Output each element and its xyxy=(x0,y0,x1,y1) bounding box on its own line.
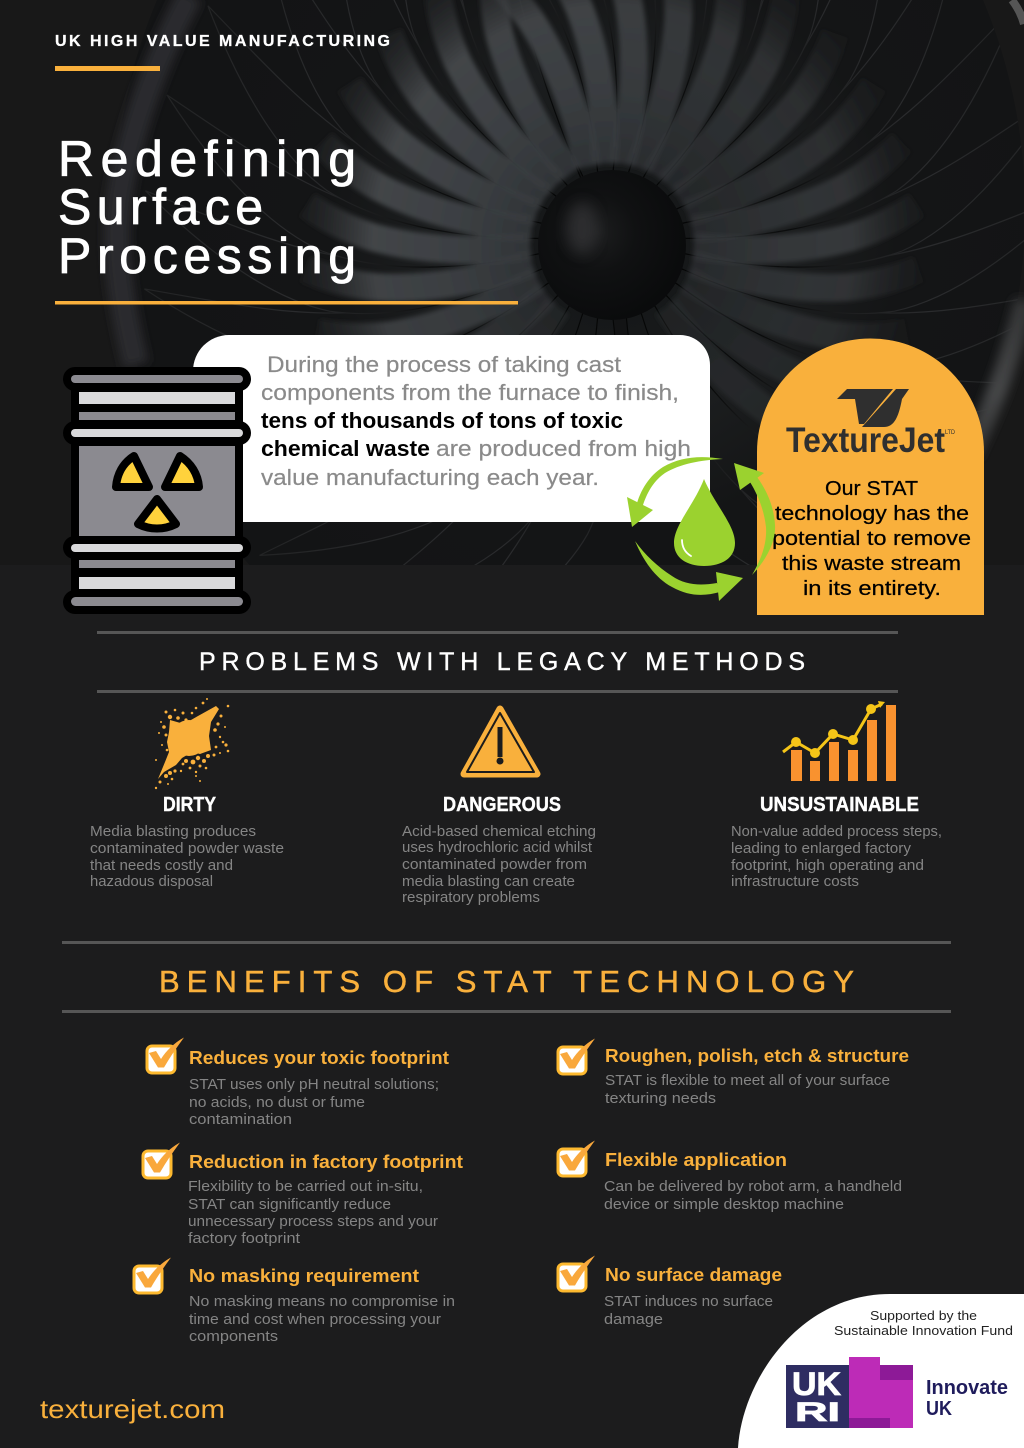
column: dirty: hazadous disposal xyxy=(90,874,213,890)
panel: funder badge xyxy=(738,1294,1024,1448)
panel: TextureJet callout: this waste stream xyxy=(782,553,961,575)
logo: Innovate UK: UK xyxy=(926,1398,952,1420)
panel: waste statement card: value manufacturing each year. xyxy=(261,465,599,490)
benefit: reduces toxic footprint xyxy=(147,1038,449,1128)
icon: dirty splat xyxy=(155,698,229,789)
logo: Innovate UK: Innovate xyxy=(926,1377,1008,1399)
panel: waste statement card: During the process of taking cast xyxy=(267,352,621,377)
benefit: flexible application xyxy=(558,1140,902,1213)
icon: toxic waste barrel xyxy=(63,367,251,614)
column: unsustainable: leading to enlarged factory xyxy=(731,841,912,857)
benefit: roughen, polish, etch and structure: STAT is flexible to meet all of your surface xyxy=(605,1073,890,1089)
heading: benefits of STAT technology xyxy=(62,941,951,1013)
logo: TextureJet: TextureJet xyxy=(786,421,945,460)
icon: recycling arrows and green drop xyxy=(627,457,775,601)
benefit: reduces toxic footprint: no acids, no dust or fume xyxy=(189,1095,365,1111)
column: dirty: Media blasting produces xyxy=(90,824,256,840)
panel: TextureJet callout: Our STAT xyxy=(825,478,918,500)
heading: problems with legacy methods xyxy=(97,631,898,693)
column: unsustainable: infrastructure costs xyxy=(731,874,859,890)
benefit: reduction in factory footprint xyxy=(143,1142,463,1247)
hero image: turbine fan xyxy=(105,0,1024,565)
title: Processing xyxy=(58,228,356,284)
column: unsustainable: Non-value added process steps, xyxy=(731,824,942,840)
header: eyebrow label xyxy=(55,33,390,71)
benefit: reduction in factory footprint: STAT can significantly reduce xyxy=(188,1197,391,1213)
panel: TextureJet callout: potential to remove xyxy=(772,528,971,550)
panel: waste statement card: chemical waste xyxy=(261,436,430,461)
panel: waste statement card: tens of thousands of tons of toxic xyxy=(261,408,623,433)
panel: waste statement card xyxy=(193,335,710,522)
logo: UKRI xyxy=(786,1357,913,1428)
benefit: no surface damage: STAT induces no surface xyxy=(604,1294,773,1310)
benefit: no masking requirement: No masking requirement xyxy=(189,1266,419,1286)
panel: funder badge: Supported by the xyxy=(870,1309,977,1323)
column: dangerous xyxy=(402,709,596,906)
column: dangerous: respiratory problems xyxy=(402,890,540,906)
panel: TextureJet callout: in its entirety. xyxy=(803,578,941,600)
benefit: roughen, polish, etch and structure: Roughen, polish, etch & structure xyxy=(605,1046,909,1066)
column: unsustainable: UNSUSTAINABLE xyxy=(760,794,919,816)
benefit: flexible application: Flexible application xyxy=(605,1150,787,1170)
column: dangerous: media blasting can create xyxy=(402,874,575,890)
column: dangerous: DANGEROUS xyxy=(443,794,561,816)
benefit: no masking requirement: No masking means no compromise in xyxy=(189,1294,455,1310)
benefit: flexible application: Can be delivered by robot arm, a handheld xyxy=(604,1179,902,1195)
panel: funder badge: Sustainable Innovation Fund xyxy=(834,1324,1013,1338)
panel: TextureJet callout: technology has the xyxy=(775,503,969,525)
benefit: no masking requirement: time and cost when processing your xyxy=(189,1312,441,1328)
column: dangerous: uses hydrochloric acid whilst xyxy=(402,840,592,856)
title xyxy=(55,131,518,304)
column: unsustainable xyxy=(731,701,942,890)
header: eyebrow label: UK HIGH VALUE MANUFACTURING xyxy=(55,33,390,50)
benefit: reduction in factory footprint: unnecessary process steps and your xyxy=(188,1214,438,1230)
benefit: no surface damage: No surface damage xyxy=(605,1265,782,1285)
logo: TextureJet: LTD xyxy=(945,430,956,436)
column: dirty xyxy=(90,698,284,890)
benefit: no masking requirement xyxy=(134,1258,455,1345)
icon: rising bar chart xyxy=(783,701,896,781)
benefit: roughen, polish, etch and structure: texturing needs xyxy=(605,1091,716,1107)
benefit: reduces toxic footprint: contamination xyxy=(189,1112,292,1128)
column: unsustainable: footprint, high operating and xyxy=(731,858,924,874)
benefit: reduction in factory footprint: Reduction in factory footprint xyxy=(189,1152,463,1172)
benefit: reduces toxic footprint: STAT uses only pH neutral solutions; xyxy=(189,1077,439,1093)
benefit: no surface damage xyxy=(558,1256,782,1328)
logo: UKRI: UK xyxy=(792,1366,841,1402)
benefit: no masking requirement: components xyxy=(189,1329,278,1345)
logo: TextureJet xyxy=(786,389,956,460)
title: Redefining xyxy=(58,131,356,187)
column: dirty: that needs costly and xyxy=(90,858,233,874)
benefit: flexible application: device or simple desktop machine xyxy=(604,1197,844,1213)
panel: TextureJet callout xyxy=(757,338,984,615)
column: dangerous: Acid-based chemical etching xyxy=(402,824,596,840)
website link: texturejet.com xyxy=(40,1394,225,1424)
logo: Innovate UK xyxy=(926,1377,1008,1420)
benefit: reduction in factory footprint: factory footprint xyxy=(188,1231,300,1247)
heading: problems with legacy methods: PROBLEMS WITH LEGACY METHODS xyxy=(199,648,805,676)
icon: warning triangle xyxy=(464,709,537,774)
heading: benefits of STAT technology: BENEFITS OF STAT TECHNOLOGY xyxy=(159,964,854,999)
panel: waste statement card: components from the furnace to finish, xyxy=(261,380,679,405)
benefit: no surface damage: damage xyxy=(604,1312,663,1328)
column: dangerous: contaminated powder from xyxy=(402,857,587,873)
column: dirty: contaminated powder waste xyxy=(90,841,284,857)
benefit: roughen, polish, etch and structure xyxy=(558,1038,909,1107)
benefit: reduces toxic footprint: Reduces your toxic footprint xyxy=(189,1048,449,1068)
title: Surface xyxy=(58,179,263,235)
column: dirty: DIRTY xyxy=(163,794,217,816)
logo: UKRI: RI xyxy=(795,1397,840,1427)
panel: waste statement card: are produced from high xyxy=(436,436,691,461)
benefit: reduction in factory footprint: Flexibility to be carried out in-situ, xyxy=(188,1179,423,1195)
